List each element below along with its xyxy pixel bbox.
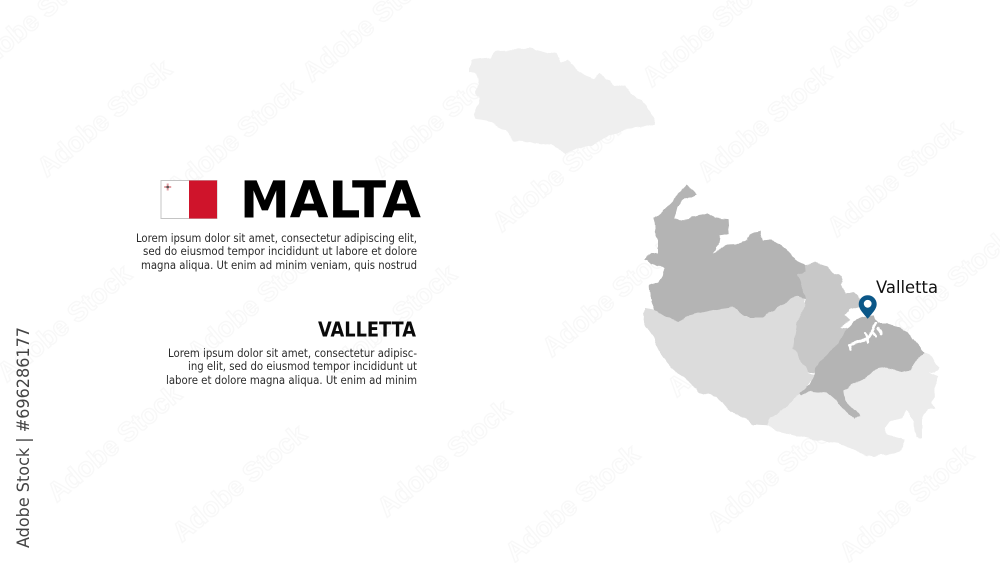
region: central xyxy=(793,263,860,373)
map pin: Valletta xyxy=(859,295,877,319)
text block: capital description: ing elit, sed do eiusmod tempor incididunt ut xyxy=(188,360,418,373)
map: Gozo island xyxy=(470,48,655,153)
map: Malta island regions xyxy=(644,186,938,456)
watermark pattern: Adobe Stock xyxy=(41,378,188,508)
map label: Valletta: Valletta xyxy=(876,278,938,297)
watermark pattern: Adobe Stock xyxy=(691,58,838,188)
watermark pattern: Adobe Stock xyxy=(661,273,808,403)
watermark pattern: Adobe Stock xyxy=(536,233,683,363)
text block: capital description xyxy=(166,347,418,387)
region: south-west xyxy=(644,296,814,426)
watermark pattern: Adobe Stock xyxy=(181,238,328,368)
region: south-east xyxy=(767,353,938,456)
title: MALTA: MALTA xyxy=(240,172,422,230)
watermark pattern: Adobe Stock xyxy=(821,113,968,243)
text block: capital description: Lorem ipsum dolor sit amet, consectetur adipisc- xyxy=(168,347,417,360)
watermark pattern: Adobe Stock xyxy=(366,53,513,183)
icon: Malta flag xyxy=(161,180,217,218)
heading: VALLETTA: VALLETTA xyxy=(318,318,416,342)
text block: intro: Lorem ipsum dolor sit amet, consectetur adipiscing elit, xyxy=(136,232,417,245)
text block: intro: sed do eiusmod tempor incididunt ut labore et dolore xyxy=(143,245,417,258)
harbour inlets xyxy=(849,323,882,350)
watermark pattern: Adobe Stock xyxy=(486,108,633,238)
watermark pattern: Adobe Stock xyxy=(701,408,848,538)
watermark pattern: Adobe Stock xyxy=(161,73,308,203)
text block: capital description: labore et dolore magna aliqua. Ut enim ad minim xyxy=(166,374,417,387)
text block: intro: magna aliqua. Ut enim ad minim veniam, quis nostrud xyxy=(141,259,417,272)
stock credit: Adobe Stock | #696286177 xyxy=(14,327,34,548)
region: north-west xyxy=(644,186,807,322)
watermark pattern: Adobe Stock xyxy=(31,53,178,183)
region: south harbour xyxy=(800,315,924,419)
text block: intro xyxy=(136,232,417,272)
watermark pattern: Adobe Stock xyxy=(371,393,518,523)
watermark pattern: Adobe Stock xyxy=(316,258,463,388)
watermark pattern: Adobe Stock xyxy=(166,418,313,548)
